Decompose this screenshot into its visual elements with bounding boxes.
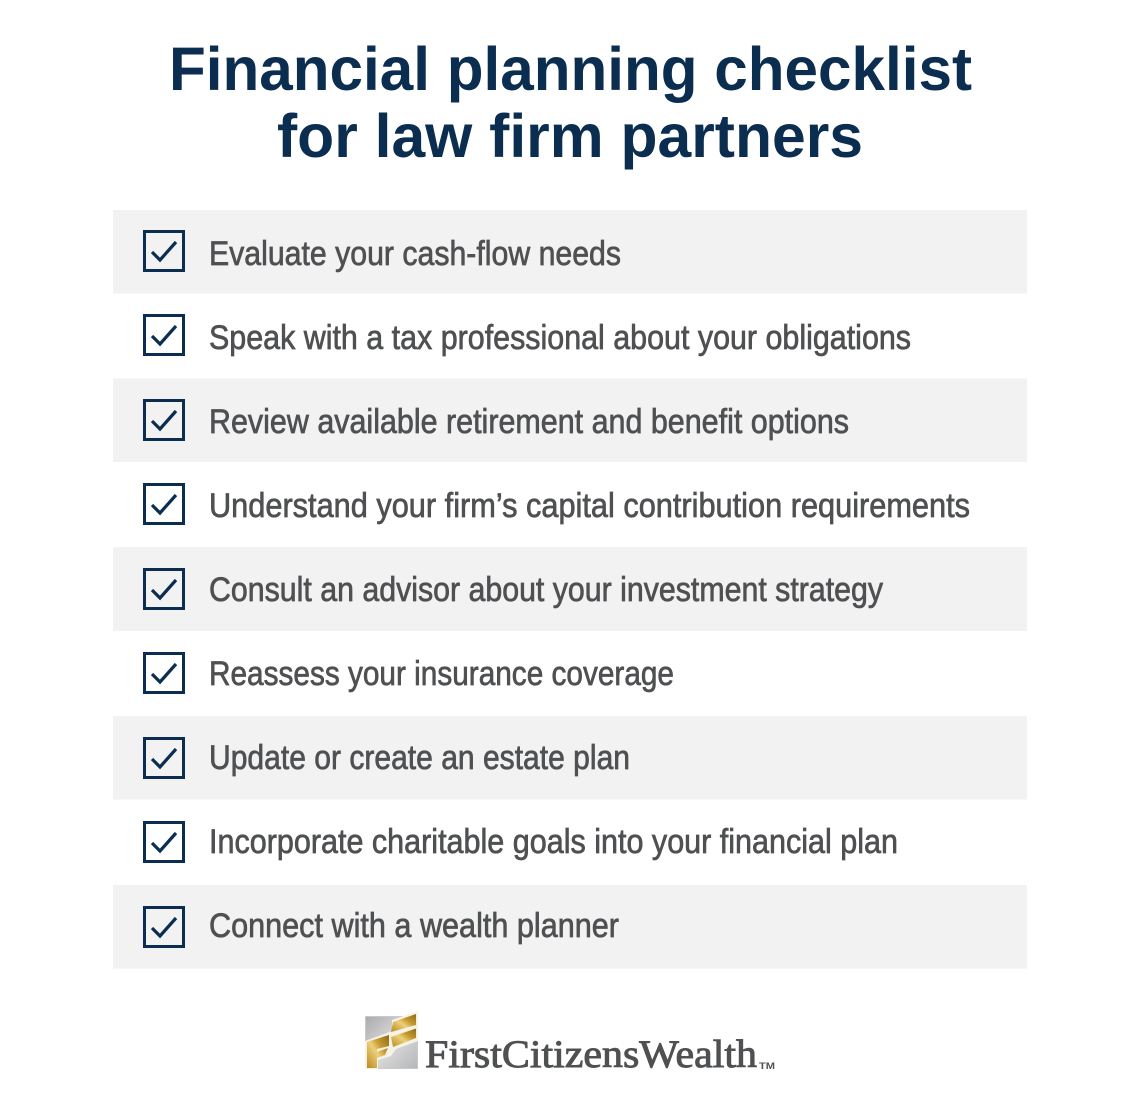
row 9: Connect with a wealth planner [209,907,619,945]
wordmark: FirstCitizensWealth [425,1033,757,1076]
row 1: Evaluate your cash-flow needs [209,235,621,273]
row 7: Update or create an estate plan [209,739,630,777]
row 3: Review available retirement and benefit options [209,403,849,441]
row 8: Incorporate charitable goals into your financial plan [209,823,898,861]
row 3 [113,378,1027,462]
row 9 [113,885,1027,968]
trademark: TM [759,1061,775,1071]
title [169,35,972,170]
row 1 [113,210,1027,294]
row 6: Reassess your insurance coverage [209,655,674,693]
row 7 [113,716,1027,800]
title: for law firm partners [277,102,863,170]
icon: logo emblem [365,1011,418,1069]
logo: First Citizens Wealth [365,1011,775,1076]
row 4: Understand your firm’s capital contribution requirements [209,487,970,525]
title: Financial planning checklist [169,35,972,103]
row 2: Speak with a tax professional about your obligations [209,319,911,357]
panel: checklist [113,210,1027,968]
row 5 [113,547,1027,631]
row 5: Consult an advisor about your investment strategy [209,571,883,609]
